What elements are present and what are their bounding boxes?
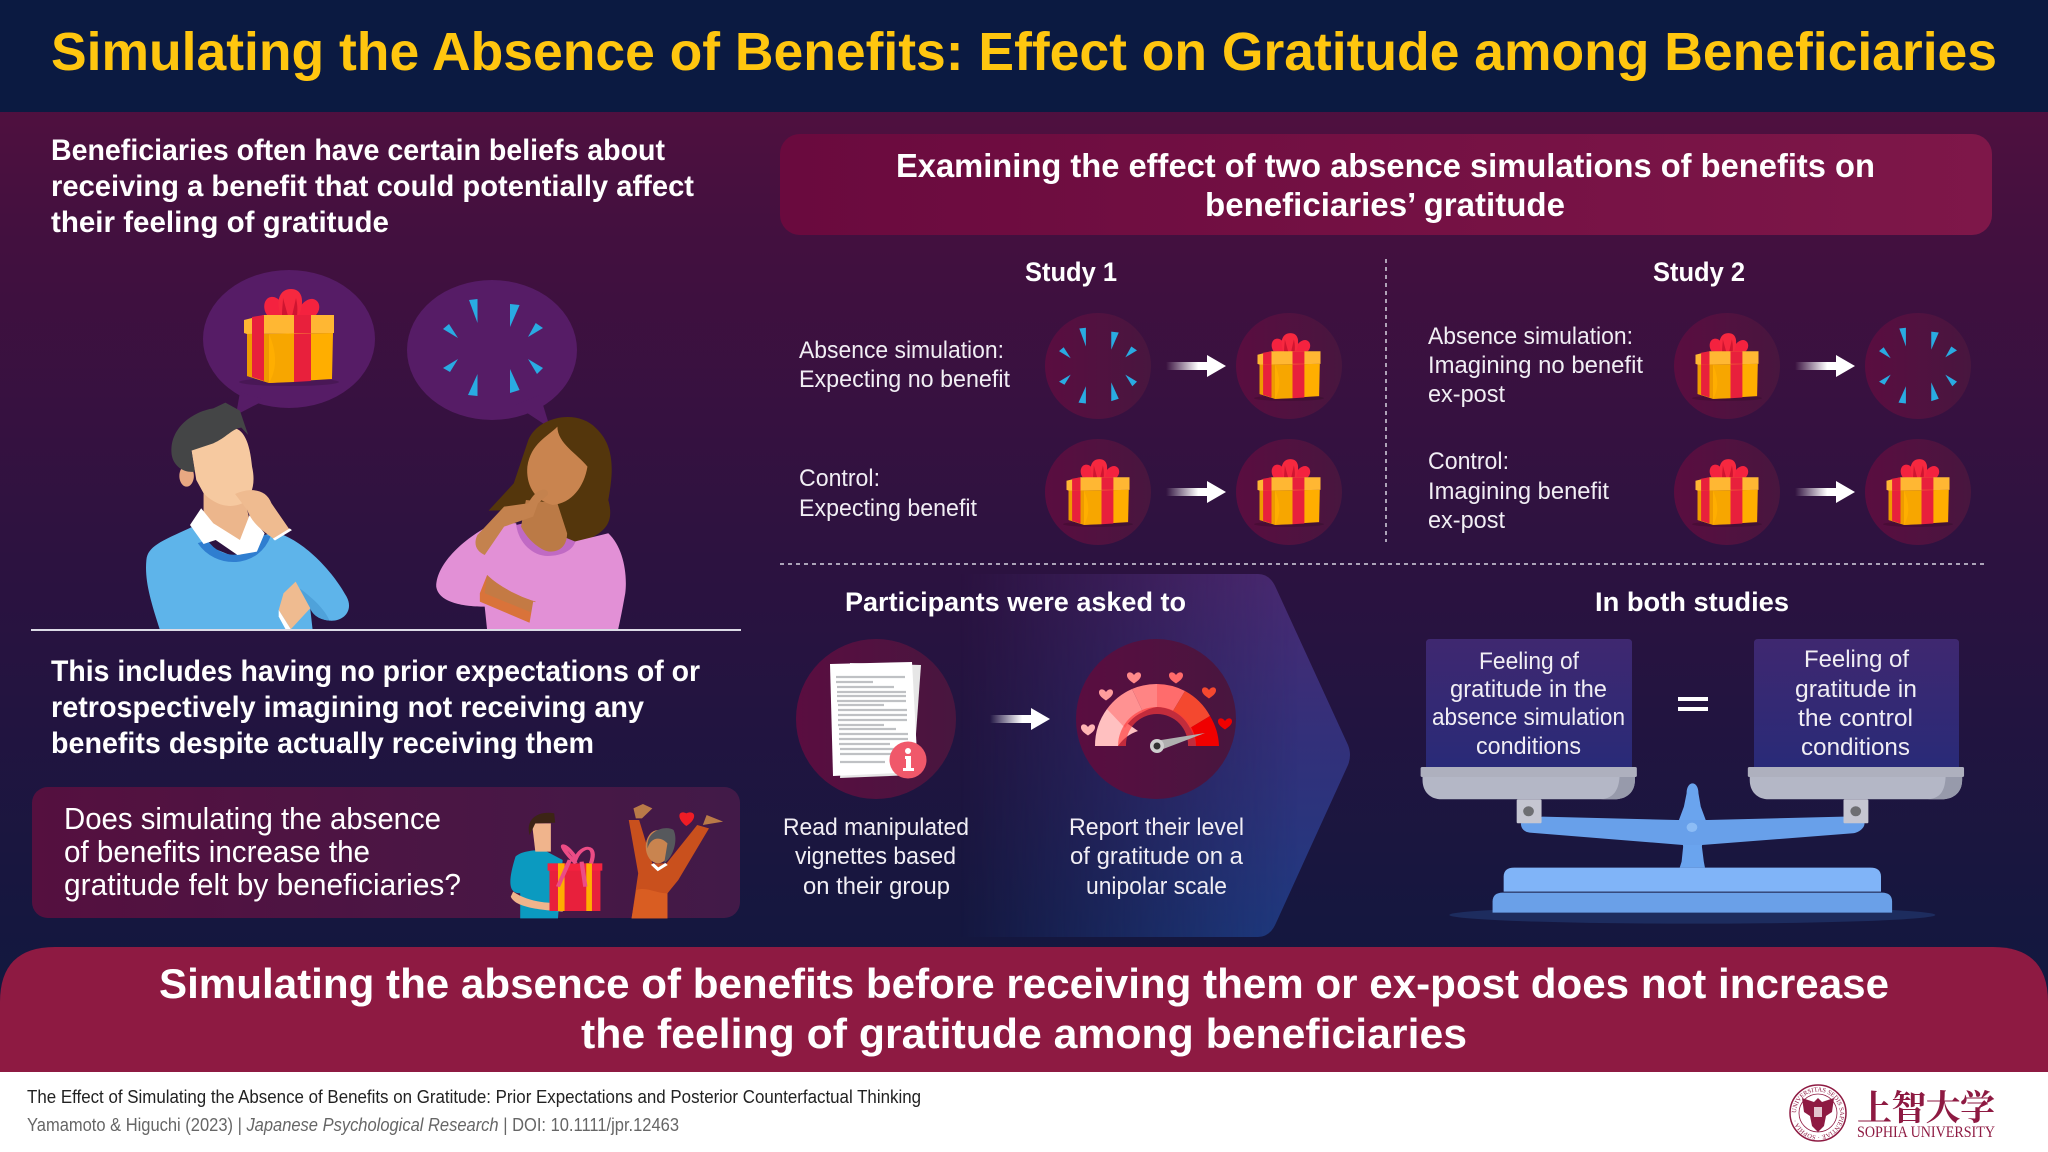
row: control, imagining benefit [1428,439,1971,545]
title band: Simulating the Absence of Benefits: Effect on Gratitude among Beneficiaries [51,22,1997,82]
panel: participants arrow shape: Participants were asked to [845,587,1186,617]
box: absence simulation conditions: conditions [1476,733,1581,760]
row: control, expecting benefit [799,439,1342,545]
citation: The Effect of Simulating the Absence of Benefits on Gratitude: Prior Expectations and Posterior Counterfactual Thinking [27,1087,921,1107]
row: control, imagining benefit: Imagining benefit [1428,478,1609,505]
footer [0,1072,2048,1152]
step: read vignettes: on their group [803,873,950,900]
step: report gratitude: of gratitude on a [1070,843,1243,870]
step: report gratitude: unipolar scale [1086,873,1227,900]
second text block: This includes having no prior expectations of or [51,655,700,688]
citation: Yamamoto & Higuchi (2023) | Japanese Psychological Research | DOI: 10.1111/jpr.12463 [27,1115,679,1135]
box: absence simulation conditions [1426,639,1632,768]
second text block: retrospectively imagining not receiving any [51,691,644,724]
step: report gratitude [1069,639,1244,900]
divider line [31,629,741,631]
row: control, expecting benefit: Expecting benefit [799,495,977,522]
box: control conditions: gratitude in [1795,676,1917,703]
logo: Sophia University [1789,1084,1995,1142]
conclusion banner [0,947,2048,1072]
panel: study 1 [799,257,1342,545]
box: control conditions: conditions [1801,734,1910,761]
seal: UNIVERSITAS SEDIS SAPIENTIAE · SOPHIA · [1792,1087,1844,1140]
woman [436,417,626,630]
row: control, imagining benefit: Control: [1428,448,1509,475]
heading panel: examining the effect: beneficiaries’ gratitude [1205,186,1565,223]
panel: question: of benefits increase the [64,834,370,869]
intro text: receiving a benefit that could potentially affect [51,170,694,203]
arrow between steps [990,708,1050,730]
row: absence simulation, imagining no benefit: Imagining no benefit [1428,352,1643,379]
second text block [51,655,700,760]
horizontal divider [780,563,1988,565]
step: report gratitude: Report their level [1069,814,1244,841]
equals sign [1678,697,1708,711]
balance scale [1421,767,1964,924]
intro text [51,134,694,239]
panel: question: gratitude felt by beneficiaries? [64,867,461,902]
panel: question: Does simulating the absence [64,801,441,836]
citation [27,1087,921,1135]
row: absence simulation, imagining no benefit: Absence simulation: [1428,323,1633,350]
heading panel: examining the effect: Examining the effect of two absence simulations of benefits on [896,147,1875,184]
step: read vignettes: vignettes based [795,843,956,870]
illustration: two people thinking [146,270,626,630]
icon: document [830,662,926,778]
conclusion banner: the feeling of gratitude among beneficiaries [581,1010,1467,1057]
icon: gauge with hearts [1081,672,1232,753]
intro text: their feeling of gratitude [51,206,389,239]
row: control, expecting benefit: Control: [799,465,880,492]
conclusion banner: Simulating the absence of benefits before receiving them or ex-post does not increase [159,960,1889,1007]
intro text: Beneficiaries often have certain beliefs about [51,134,665,167]
row: absence simulation, imagining no benefit [1428,313,1971,419]
icon: woman celebrating [629,804,723,918]
divider between studies [1385,259,1387,542]
logo: Sophia University: SOPHIA UNIVERSITY [1857,1124,1995,1141]
title band [0,0,2048,112]
second text block: benefits despite actually receiving them [51,727,594,760]
box: control conditions: the control [1798,705,1913,732]
speech bubble with nothing [407,280,577,428]
box: control conditions: Feeling of [1804,646,1909,673]
man [146,403,349,630]
panel: study 1: Study 1 [1025,257,1117,287]
logo: Sophia University: 上智大学 [1857,1089,1995,1128]
panel: in both studies: In both studies [1595,587,1789,617]
step: read vignettes [783,639,969,900]
row: absence simulation, imagining no benefit: ex-post [1428,381,1505,408]
heading panel: examining the effect [780,134,1992,235]
panel: in both studies [1421,587,1964,924]
box: absence simulation conditions: absence simulation [1432,704,1625,731]
row: absence simulation, expecting no benefit: Absence simulation: [799,337,1004,364]
row: absence simulation, expecting no benefit [799,313,1342,419]
box: absence simulation conditions: gratitude in the [1450,676,1607,703]
box: control conditions [1754,639,1959,768]
row: control, imagining benefit: ex-post [1428,507,1505,534]
speech bubble with gift [203,270,375,415]
panel: question [32,787,740,918]
step: read vignettes: Read manipulated [783,814,969,841]
panel: participants arrow shape [780,574,1350,937]
row: absence simulation, expecting no benefit: Expecting no benefit [799,366,1010,393]
icon: man giving gift [510,813,602,918]
panel: study 2: Study 2 [1653,257,1745,287]
panel: study 2 [1428,257,1971,545]
box: absence simulation conditions: Feeling of [1479,648,1579,675]
